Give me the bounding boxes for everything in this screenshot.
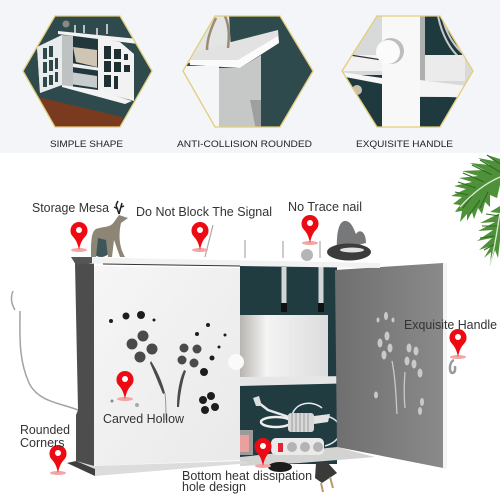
right door (335, 263, 443, 468)
hexagon: simple shape (20, 14, 155, 130)
caption: exquisite handle: EXQUISITE HANDLE (356, 139, 453, 149)
cabinet interior (240, 266, 337, 464)
door engraving (374, 312, 424, 415)
hexagon: exquisite handle (340, 14, 475, 130)
label: storage mesa: Storage Mesa (32, 201, 109, 215)
door handle (228, 354, 244, 370)
antennas (284, 267, 321, 303)
pin: signal (192, 222, 208, 252)
pin: rounded corners (50, 445, 66, 475)
label: bottom heat dissipation hole design: dissipation (253, 469, 312, 483)
pin: carved hollow (116, 371, 134, 401)
power cord (12, 291, 78, 410)
panel: top feature band (0, 0, 500, 153)
label: carved hollow: Carved Hollow (103, 412, 185, 426)
black plug (268, 462, 337, 492)
bottom shelf (240, 447, 375, 466)
top shelf (71, 257, 380, 268)
router box (240, 315, 328, 377)
stone ornament (327, 221, 371, 260)
pin: no trace nail (302, 215, 318, 245)
palm leaves (451, 155, 500, 266)
pin: bottom heat dissipation (254, 438, 272, 468)
caption: anti-collision rounded: ANTI-COLLISION ROUNDED (177, 139, 313, 149)
label: do not block the signal: Do Not Block The Signal (136, 205, 272, 219)
caption: simple shape: SIMPLE SHAPE (50, 139, 123, 149)
power strip (271, 438, 324, 455)
deer figurine (91, 201, 128, 257)
hexagon: anti-collision rounded (180, 14, 315, 130)
left side panel (75, 263, 94, 466)
red device (240, 430, 253, 455)
cabinet (67, 257, 447, 476)
left door (94, 266, 240, 466)
label: bottom heat dissipation hole design: Bottom heat (182, 469, 253, 483)
shelf antennas (205, 225, 320, 258)
base plate (67, 461, 250, 476)
clover cutouts (126, 330, 202, 420)
decorative ball (301, 249, 313, 261)
label: rounded corners: Rounded (20, 423, 70, 437)
label: exquisite handle: Exquisite Handle (404, 318, 497, 332)
hook below pin (450, 360, 455, 373)
small clover and dots (109, 311, 226, 414)
middle shelf (240, 376, 361, 386)
pin: storage mesa (70, 222, 88, 252)
label: rounded corners: Corners (20, 436, 64, 450)
cable coil (253, 396, 340, 446)
label: no trace nail: No Trace nail (288, 200, 362, 214)
pin: exquisite handle (450, 329, 466, 359)
label: bottom heat dissipation hole design: hole design (182, 480, 246, 494)
